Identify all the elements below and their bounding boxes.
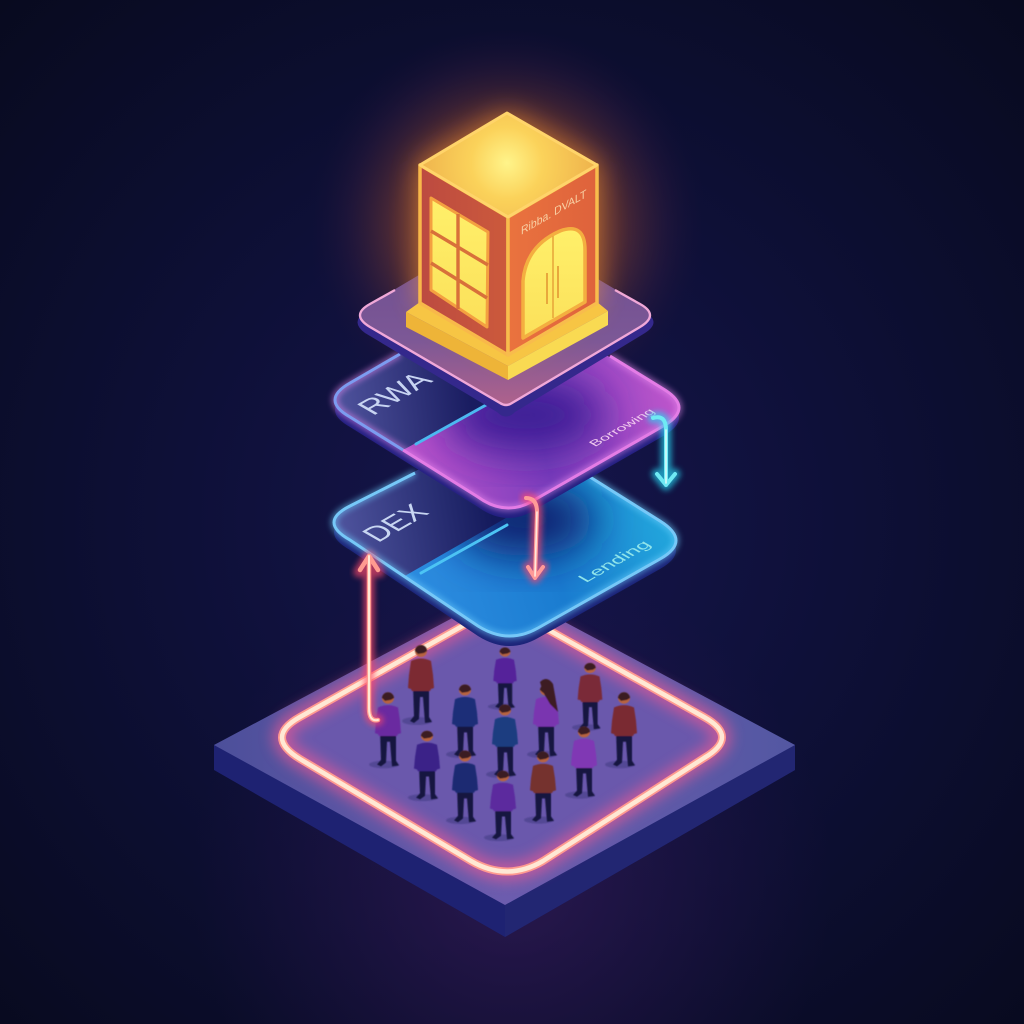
arrow: RWA layer down to DEX layer (pink): [526, 498, 543, 578]
person 11: [446, 750, 478, 824]
left wall: [420, 165, 508, 355]
arrow: community up to DEX: [359, 556, 379, 720]
person 3: [572, 663, 602, 731]
plinth: [406, 302, 608, 380]
roof: [420, 113, 597, 217]
person 12: [524, 752, 556, 824]
person 6: [605, 692, 637, 768]
person 5: [527, 679, 559, 758]
neon ring around community: [282, 614, 722, 872]
person 4: [446, 684, 478, 758]
people: community group: [369, 645, 637, 841]
person 2: [488, 647, 517, 710]
panel: RWA and Borrowing layer: [328, 350, 686, 518]
panel: community base platform: [214, 590, 795, 937]
panel: DEX and Lending layer: [327, 468, 683, 646]
divider line: [416, 405, 486, 444]
icon: golden vault building: [406, 113, 608, 380]
label: Lending: Lending: [574, 538, 656, 585]
person 1: [402, 645, 434, 725]
window: [431, 198, 488, 327]
person 7: [369, 692, 401, 768]
label: DEX: DEX: [355, 500, 436, 546]
label: Borrowing: Borrowing: [585, 407, 659, 448]
label: RWA: RWA: [350, 368, 441, 419]
right wall: [508, 165, 597, 355]
panel: vault pedestal plate: [358, 224, 654, 416]
person 10: [565, 727, 597, 799]
person 13: [484, 771, 516, 841]
vault sign: Ribba. DVALT: [521, 188, 586, 238]
person 8: [486, 704, 518, 778]
divider line: [421, 525, 507, 573]
door: [523, 229, 585, 338]
arrow: Borrowing down to Lending (cyan): [653, 417, 675, 485]
person 9: [408, 731, 440, 801]
building glow: [420, 113, 597, 355]
